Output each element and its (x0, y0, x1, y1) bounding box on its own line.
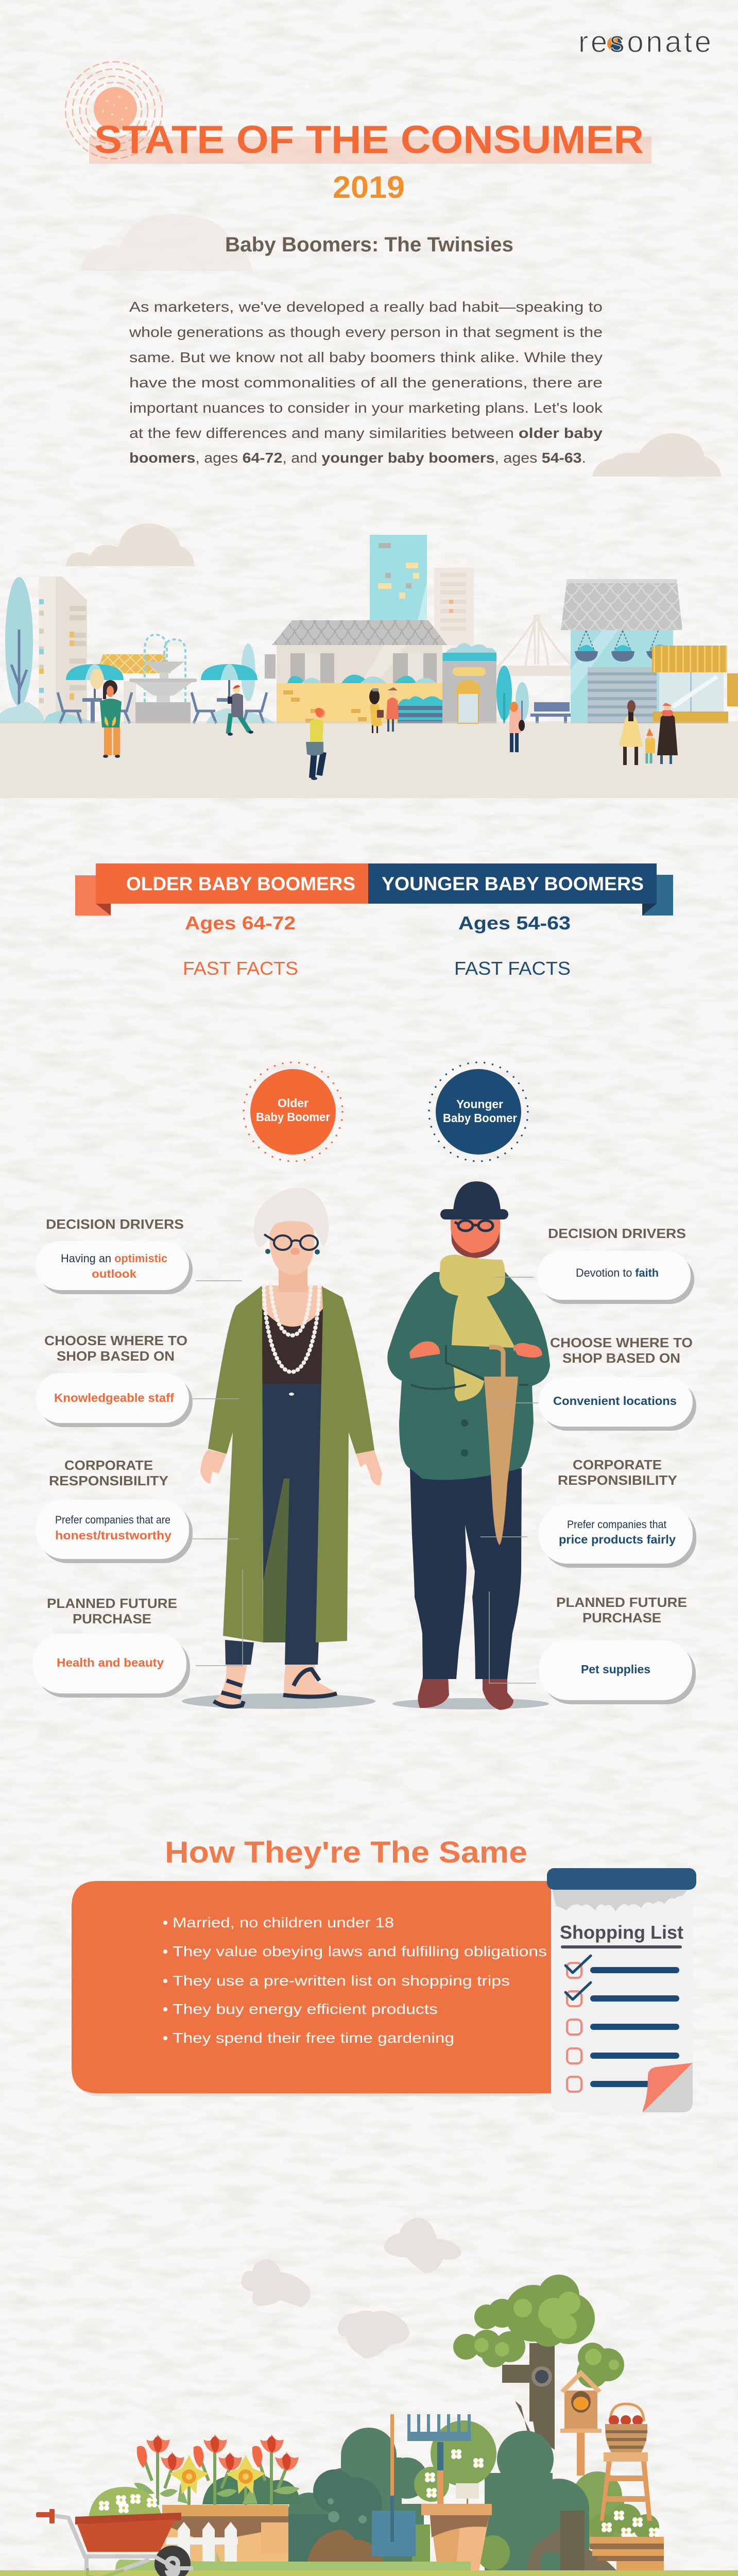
panel: older choose where to shop (36, 1333, 193, 1427)
panel: younger corporate responsibility: price products fairly (559, 1533, 676, 1546)
panel: older choose where to shop: CHOOSE WHERE TO (44, 1333, 187, 1348)
icon: shopping list (547, 1868, 696, 2112)
panel: older corporate responsibility: RESPONSIBILITY (49, 1473, 168, 1488)
label: fast facts older: FAST FACTS (183, 958, 298, 979)
illustration: city ground (0, 723, 738, 798)
illustration: tree and birdhouse (453, 2275, 624, 2476)
subtitle: Baby Boomers: The Twinsies (225, 233, 513, 256)
badge: older baby boomer: Baby Boomer (256, 1110, 330, 1124)
badge: older baby boomer (244, 1062, 342, 1161)
panel: older decision drivers (36, 1216, 193, 1294)
panel: younger decision drivers: Devotion to faith (576, 1266, 659, 1279)
illustration: flower pot (421, 2504, 492, 2570)
illustration: clouds above garden (241, 2218, 461, 2359)
panel: similarities list (72, 1881, 553, 2096)
panel: similarities list: • (163, 1943, 168, 1959)
decorative cloud: behind subtitle (81, 214, 252, 271)
panel: younger decision drivers: DECISION DRIVERS (548, 1226, 686, 1241)
illustration: flowers and planter (134, 2434, 301, 2570)
intro paragraph: have the most commonalities of all the generations, there are (129, 375, 603, 391)
logo: resonate (top): resonate (578, 25, 711, 59)
panel: older choose where to shop: Knowledgeable staff (54, 1391, 174, 1404)
panel: older choose where to shop: SHOP BASED ON (57, 1348, 175, 1364)
intro paragraph: As marketers, we've developed a really bad habit—speaking to (129, 299, 603, 315)
panel: younger choose where to shop: SHOP BASED ON (562, 1350, 680, 1366)
panel: similarities list: They buy energy efficient products (173, 2001, 438, 2017)
label: ages 64-72: Ages 64-72 (185, 912, 296, 934)
illustration: shovel and rake (372, 2414, 471, 2566)
panel: similarities list: They value obeying laws and fulfilling obligations (173, 1943, 547, 1959)
illustration: city street scene (0, 535, 738, 780)
panel: similarities list: Married, no children under 18 (173, 1914, 394, 1930)
panel: younger corporate responsibility (539, 1457, 696, 1568)
illustration: younger baby boomer man (387, 1181, 550, 1710)
cloud: above city (66, 523, 194, 566)
panel: younger choose where to shop (539, 1335, 696, 1431)
illustration: grass strip (115, 2552, 471, 2570)
panel: younger corporate responsibility: Prefer companies that (567, 1519, 666, 1531)
panel: younger choose where to shop: CHOOSE WHERE TO (550, 1335, 693, 1350)
panel: similarities list: • (163, 2001, 168, 2017)
banner: older and younger baby boomers: YOUNGER BABY BOOMERS (382, 873, 644, 894)
badge: older baby boomer: Older (278, 1096, 308, 1110)
panel: older corporate responsibility: honest/trustworthy (55, 1529, 171, 1542)
badge: younger baby boomer: Younger (456, 1097, 503, 1111)
panel: older corporate responsibility: Prefer companies that are (55, 1514, 170, 1526)
panel: younger planned future purchase: PURCHASE (582, 1610, 661, 1625)
panel: younger planned future purchase: PLANNED FUTURE (556, 1595, 687, 1610)
panel: older planned future purchase: PLANNED FUTURE (47, 1596, 177, 1611)
panel: similarities list: They use a pre-written list on shopping trips (173, 1973, 510, 1989)
banner: older and younger baby boomers (75, 863, 673, 916)
heading: how they're the same: How They're The Same (165, 1836, 527, 1869)
intro paragraph: whole generations as though every person in that segment is the (129, 324, 603, 340)
intro paragraph: important nuances to consider in your marketing plans. Let's look (129, 400, 603, 416)
illustration: older baby boomer woman (182, 1188, 382, 1709)
year: 2019 (333, 170, 405, 205)
panel: older planned future purchase: PURCHASE (73, 1611, 151, 1626)
panel: similarities list: • (163, 1914, 168, 1930)
panel: similarities list: • (163, 2030, 168, 2046)
panel: younger corporate responsibility: CORPORATE (573, 1457, 662, 1472)
badge: younger baby boomer: Baby Boomer (443, 1111, 517, 1125)
panel: younger corporate responsibility: RESPONSIBILITY (558, 1472, 677, 1488)
panel: older corporate responsibility (36, 1458, 193, 1563)
intro paragraph: at the few differences and many similarities between older baby (129, 425, 603, 441)
banner: older and younger baby boomers: OLDER BABY BOOMERS (126, 873, 355, 894)
intro paragraph: boomers , ages 64-72, and younger baby boomers , ages 54-63. (129, 450, 586, 466)
panel: older decision drivers: Having an optimistic (61, 1252, 167, 1265)
panel: older corporate responsibility: CORPORATE (64, 1458, 153, 1473)
panel: older decision drivers: DECISION DRIVERS (46, 1216, 184, 1232)
panel: similarities list: • (163, 1973, 168, 1989)
panel: older planned future purchase: Health and beauty (57, 1656, 164, 1669)
illustration: wheelbarrow (36, 2487, 193, 2576)
wheelbarrow wheel over grass (88, 2568, 193, 2576)
badge: younger baby boomer (429, 1062, 528, 1161)
cloud: right of paragraph (592, 433, 721, 477)
illustration: picket fence (166, 2522, 238, 2562)
title: State of the Consumer: STATE OF THE CONSUMER (94, 118, 644, 162)
ground: grass (0, 2570, 738, 2576)
panel: younger planned future purchase: Pet supplies (581, 1663, 650, 1676)
illustration: mound of soil (306, 2530, 386, 2570)
panel: younger decision drivers (537, 1226, 694, 1304)
panel: similarities list: They spend their free time gardening (173, 2030, 454, 2046)
label: fast facts younger: FAST FACTS (454, 958, 571, 979)
panel: older planned future purchase (32, 1596, 190, 1698)
intro paragraph: same. But we know not all baby boomers think alike. While they (129, 349, 603, 365)
illustration: stump and right planter (527, 2504, 664, 2570)
panel: younger choose where to shop: Convenient locations (553, 1394, 677, 1408)
panel: older decision drivers: outlook (92, 1267, 137, 1280)
icon: shopping list: Shopping List (560, 1922, 683, 1943)
panel: younger planned future purchase (539, 1595, 696, 1704)
label: ages 54-63: Ages 54-63 (458, 912, 571, 934)
illustration: bushes (287, 2420, 639, 2570)
icon: dashed sun (65, 62, 162, 159)
illustration: stool and apple basket (600, 2404, 652, 2521)
connector lines: left and right (193, 1277, 538, 1683)
intro paragraph (129, 299, 603, 466)
